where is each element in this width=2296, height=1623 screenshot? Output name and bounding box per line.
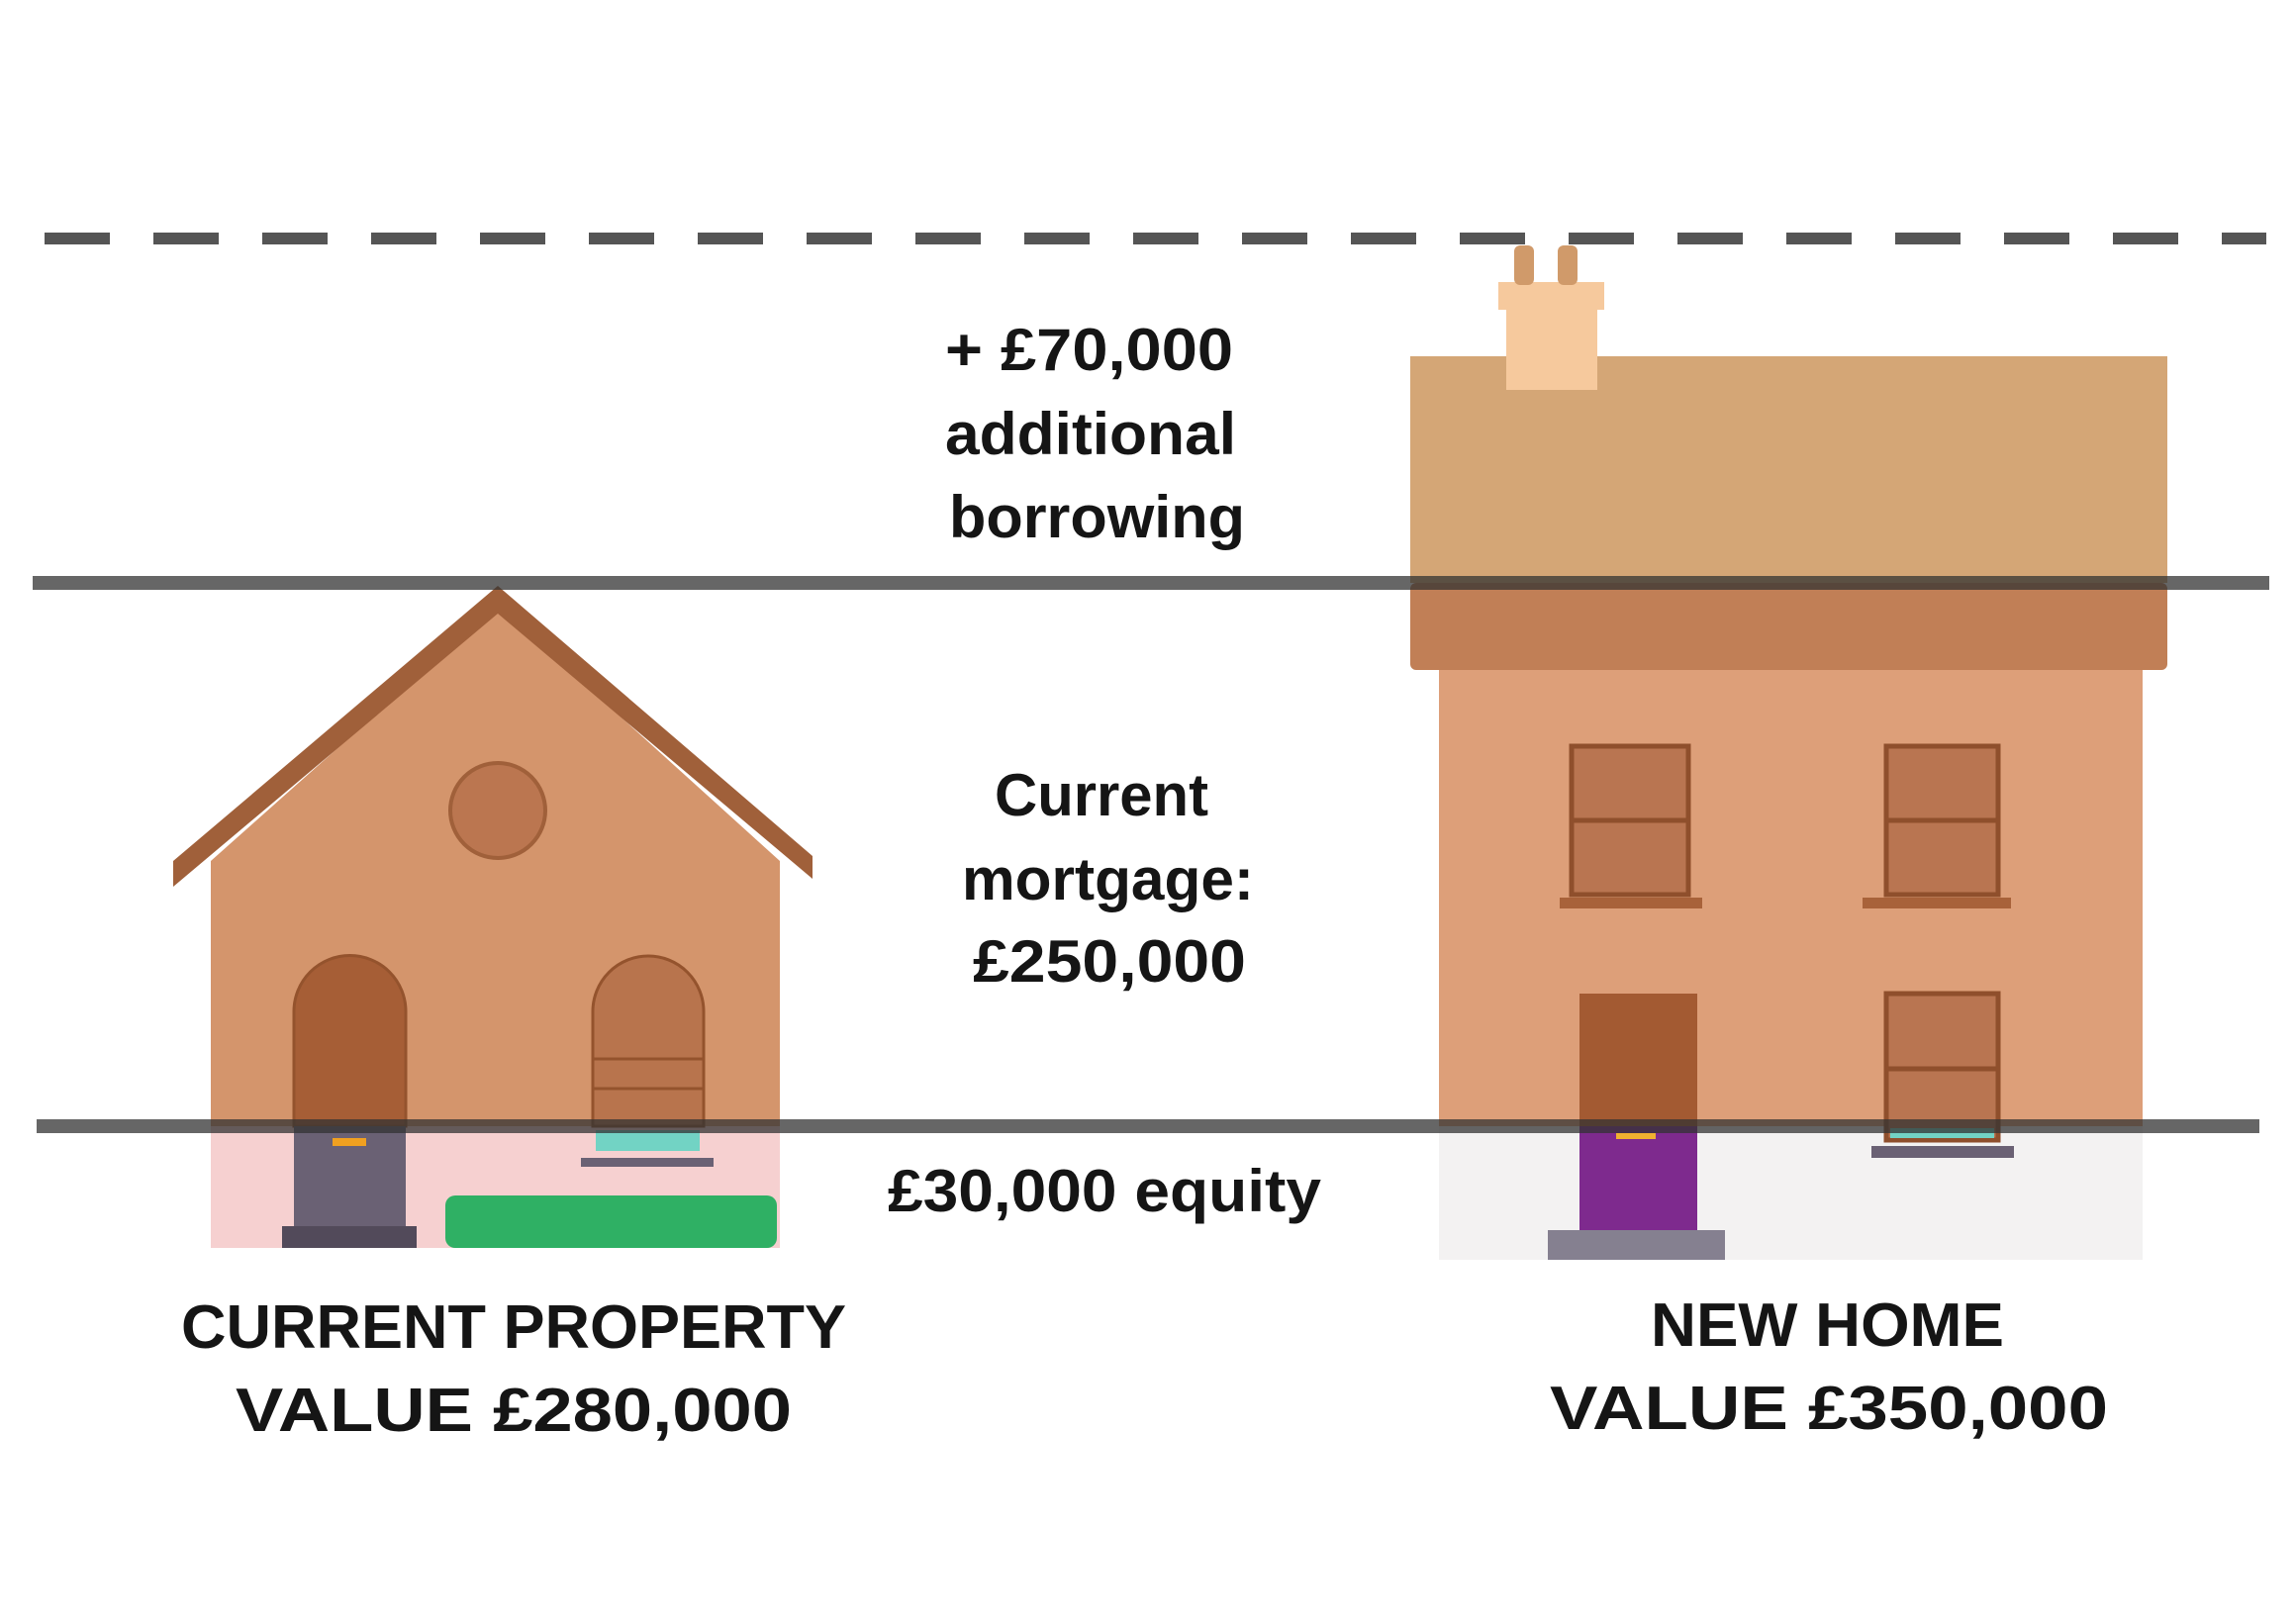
line: equity top bbox=[37, 1119, 2259, 1133]
dashed top line bbox=[45, 233, 2266, 244]
text: current mortgage: Current bbox=[995, 762, 1208, 828]
text: additional borrowing: borrowing bbox=[949, 484, 1245, 550]
line: mortgage top bbox=[33, 576, 2269, 590]
label: new home bbox=[1550, 1291, 2108, 1443]
label: current property bbox=[181, 1293, 846, 1445]
text: equity: £30,000 equity bbox=[888, 1158, 1322, 1224]
label: current property: VALUE £280,000 bbox=[236, 1377, 792, 1445]
text: current mortgage bbox=[962, 762, 1254, 995]
label: new home: VALUE £350,000 bbox=[1550, 1375, 2108, 1443]
text: additional borrowing: additional bbox=[945, 401, 1236, 467]
text: additional borrowing: + £70,000 bbox=[945, 317, 1233, 383]
icon: new home house bbox=[1410, 245, 2167, 1260]
text: additional borrowing bbox=[945, 317, 1245, 550]
text: current mortgage: £250,000 bbox=[973, 928, 1246, 995]
label: current property: CURRENT PROPERTY bbox=[181, 1293, 846, 1362]
label: new home: NEW HOME bbox=[1651, 1291, 2004, 1360]
icon: current property house bbox=[173, 586, 813, 1248]
text: current mortgage: mortgage: bbox=[962, 846, 1254, 912]
